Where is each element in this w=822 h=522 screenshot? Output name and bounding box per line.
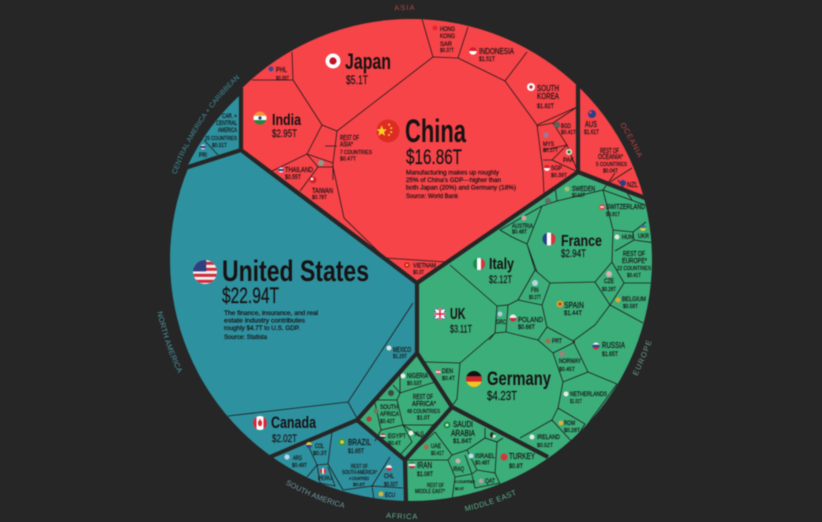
label: India xyxy=(272,112,301,140)
label: Israel: $0.48T xyxy=(475,460,491,466)
label: Russia: RUSSIA xyxy=(602,340,625,350)
label: Chile: $0.32T xyxy=(384,482,399,488)
label: India: India xyxy=(272,112,301,129)
region name: Asia: ASIA xyxy=(394,4,415,11)
flag: United States xyxy=(193,260,217,284)
label: Rest of Middle East: MIDDLE EAST* xyxy=(415,489,446,495)
label: South Africa: $0.42T xyxy=(380,419,396,425)
label: Rest of Oceania: $0.04T xyxy=(603,168,618,174)
label: Poland: POLAND xyxy=(518,315,543,324)
label: United States: United States xyxy=(222,255,369,288)
label: Czechia xyxy=(602,271,617,293)
label: Czechia: CZE xyxy=(604,279,614,285)
label: Hong Kong: KONG xyxy=(440,33,455,40)
label: Hong Kong: $0.37T xyxy=(440,48,455,54)
label: Indonesia xyxy=(469,47,515,63)
flag: Germany xyxy=(466,371,482,387)
note: China manufacturing: Manufacturing makes up roughly xyxy=(406,170,499,176)
region name: North America: NORTH AMERICA xyxy=(157,311,182,374)
region name: Central America + Caribbean: CENTRAL AMERICA + CARIBBEAN xyxy=(172,74,240,174)
label: Rest of Oceania: REST OF xyxy=(600,148,619,155)
label: Saudi Arabia: SAUDI xyxy=(453,420,473,429)
label: United States xyxy=(222,255,369,308)
label: Ecuador: ECU xyxy=(385,493,395,499)
label: Belgium xyxy=(616,297,646,310)
label: Italy xyxy=(489,256,514,286)
label: Rest of Asia xyxy=(340,135,373,162)
label: Switzerland: SWITZERLAND xyxy=(606,204,645,211)
region: Middle East labels xyxy=(408,420,536,495)
label: Canada xyxy=(271,413,316,445)
label: Hong Kong: SAR xyxy=(440,41,452,48)
label: Hungary: HUN xyxy=(622,235,633,241)
label: Nigeria: $0.53T xyxy=(407,381,423,387)
label: South Africa: AFRICA xyxy=(380,411,400,418)
panel: Asia and Oceania xyxy=(242,18,644,281)
label: Belgium: $0.59T xyxy=(623,304,639,310)
label: Singapore xyxy=(544,165,568,179)
label: Malaysia: $0.37T xyxy=(543,148,559,154)
region: Central America labels: PRI xyxy=(199,153,207,159)
label: Romania: $0.28T xyxy=(564,428,581,434)
label: Rest of Oceania: OCEANIA* xyxy=(598,154,623,161)
label: Qatar: QAT xyxy=(485,479,495,485)
label: Rest of Middle East: $0.3T xyxy=(455,486,464,491)
label: UAE xyxy=(424,443,444,457)
label: Finland: FIN xyxy=(531,288,538,294)
label: Chile: CHL xyxy=(384,474,395,480)
flag: India xyxy=(254,112,266,124)
label: Colombia: COL xyxy=(315,443,324,450)
label: Austria: $0.48T xyxy=(512,230,527,236)
label: Rest of Asia: 7 COUNTRIES xyxy=(340,150,373,156)
label: Rest of Europe: 22 COUNTRIES xyxy=(617,266,651,272)
label: UAE: UAE xyxy=(431,443,441,450)
label: Poland: $0.66T xyxy=(518,325,535,331)
panel: North America xyxy=(169,152,416,456)
label: Rest of Europe: REST OF xyxy=(623,251,645,258)
label: Rest of South America: 4 COUNTRIES xyxy=(349,476,369,481)
label: Sweden: $0.63T xyxy=(572,193,585,199)
label: Rest of Africa: $1.0T xyxy=(417,416,431,422)
icon: Kuwait-like small flag xyxy=(490,432,496,438)
label: Rest of Europe: $0.41T xyxy=(627,273,642,279)
label: Turkey: $0.8T xyxy=(509,463,523,470)
label: Denmark: $0.4T xyxy=(442,376,456,382)
region: Central America labels: 25 COUNTRIES xyxy=(205,136,238,142)
region name: South America: SOUTH AMERICA xyxy=(286,480,344,508)
label: Denmark: DEN xyxy=(442,369,453,375)
icon: Myanmar-like gray flag xyxy=(318,160,324,166)
label: France: $2.94T xyxy=(561,248,586,260)
chart: GDP voronoi circle xyxy=(169,18,653,502)
region: Central America labels: CAR. + xyxy=(222,114,237,120)
label: Saudi Arabia: $1.84T xyxy=(453,438,472,445)
region name: Middle East: MIDDLE EAST xyxy=(464,489,516,512)
region names around the circle xyxy=(157,4,652,520)
label: Vietnam: VIETNAM xyxy=(413,262,436,270)
label: UK: UK xyxy=(450,306,466,323)
label: Rest of Oceania: 5 COUNTRIES xyxy=(596,162,628,168)
region: Asia labels xyxy=(254,26,577,276)
label: Mexico: $1.29T xyxy=(393,354,408,360)
label: Ireland: IRELAND xyxy=(537,434,560,441)
label: Egypt xyxy=(380,433,406,447)
label: Malaysia: MYS xyxy=(543,141,555,148)
label: Germany: $4.23T xyxy=(487,388,517,403)
label: Iran: IRAN xyxy=(417,461,432,470)
label: Brazil xyxy=(338,437,371,455)
label: Switzerland xyxy=(599,204,645,218)
region: Central America labels: $0.51T xyxy=(212,143,228,149)
region: North America labels xyxy=(193,255,411,445)
label: Peru: PERU xyxy=(318,476,332,482)
label: Iran: $1.08T xyxy=(417,471,433,478)
flag: Italy xyxy=(473,258,485,270)
label: Canada: $2.02T xyxy=(272,433,297,445)
label: Finland xyxy=(529,280,541,301)
label: Philippines: PHL xyxy=(276,67,287,74)
note: China manufacturing: 25% of China's GDP—higher than xyxy=(406,178,501,184)
label: Rest of Middle East: REST OF xyxy=(427,483,444,489)
label: Switzerland: $0.81T xyxy=(606,212,621,218)
note: China manufacturing xyxy=(406,170,516,200)
label: Hungary xyxy=(614,234,633,241)
label: Rest of South America: SOUTH AMERICA* xyxy=(342,470,378,476)
thick region borders xyxy=(185,85,645,503)
label: UK: $3.11T xyxy=(450,324,472,336)
label: Rest of Oceania xyxy=(596,148,628,174)
label: Indonesia: INDONESIA xyxy=(479,47,515,56)
label: Rest of Europe: EUROPE* xyxy=(622,258,647,265)
label: South Korea: $1.82T xyxy=(537,103,554,110)
label: South Korea: KOREA xyxy=(537,92,560,101)
label: Saudi Arabia: ARABIA xyxy=(451,429,476,438)
region: Central America labels xyxy=(199,114,238,159)
label: Thailand xyxy=(278,167,313,181)
label: Austria xyxy=(512,216,533,236)
label: Taiwan: $0.78T xyxy=(312,195,328,201)
label: Spain xyxy=(556,300,584,317)
label: Rest of Middle East xyxy=(415,479,475,495)
note: US finance: roughly $4.7T to U.S. GDP. xyxy=(224,326,300,332)
note: US finance xyxy=(224,311,318,341)
label: Japan xyxy=(345,49,391,87)
label: Australia xyxy=(584,110,599,136)
region: Central America labels: AMERICA xyxy=(218,128,237,134)
label: Philippines xyxy=(268,66,289,82)
label: Bangladesh: BGD xyxy=(561,123,571,130)
label: Vietnam: $0.3T xyxy=(413,270,424,276)
label: New Zealand: NZL xyxy=(627,182,638,189)
label: Sweden xyxy=(564,186,595,199)
icon: Kenya-like small flag xyxy=(388,390,394,396)
label: South Africa xyxy=(374,404,400,425)
label: India: $2.95T xyxy=(272,128,297,140)
label: Nigeria: NIGERIA xyxy=(407,373,428,380)
label: Rest of Asia: REST OF xyxy=(340,135,359,142)
label: Romania: ROM xyxy=(564,421,575,427)
label: Rest of Africa: REST OF xyxy=(413,394,433,401)
label: Egypt: $0.4T xyxy=(388,441,402,447)
label: Rest of Asia: ASIA* xyxy=(340,142,353,148)
label: United States: $22.94T xyxy=(222,283,279,308)
label: Bangladesh: $0.41T xyxy=(561,130,577,136)
label: Ireland: $0.52T xyxy=(537,443,554,449)
label: Finland: $0.27T xyxy=(529,295,541,301)
note: China manufacturing: both Japan (20%) and Germany (18%) xyxy=(406,186,516,192)
label: Vietnam xyxy=(404,262,436,276)
label: Taiwan xyxy=(310,177,333,201)
label: Japan: $5.1T xyxy=(346,73,368,87)
label: Rest of Middle East: 4 COUNTRIES xyxy=(455,479,475,484)
label: Denmark xyxy=(435,369,456,382)
region: Oceania labels xyxy=(584,110,638,189)
label: Thailand: THAILAND xyxy=(285,167,313,174)
region name: Africa: AFRICA xyxy=(386,512,418,520)
label: Netherlands: NETHERLANDS xyxy=(570,391,608,398)
label: Greece xyxy=(496,312,506,326)
label: Italy: $2.12T xyxy=(489,274,512,286)
label: Portugal xyxy=(546,338,562,345)
panel: South America xyxy=(273,422,404,502)
label: Iran xyxy=(408,461,433,478)
label: France xyxy=(561,233,602,260)
label: Poland xyxy=(510,314,543,331)
label: Russia xyxy=(592,340,625,358)
label: Germany xyxy=(487,368,551,403)
label: Rest of Africa: 48 COUNTRIES xyxy=(407,409,440,415)
label: Czechia: $0.28T xyxy=(602,287,617,293)
flag: UK xyxy=(434,308,446,320)
region name: Europe: EUROPE xyxy=(632,340,652,376)
panel: Central America and Caribbean xyxy=(187,96,239,167)
label: Egypt: EGYPT xyxy=(388,433,406,440)
label: Rest of Europe xyxy=(617,251,651,279)
icon: Luxembourg-like small flag xyxy=(545,198,551,204)
label: Argentina: ARG xyxy=(293,456,302,462)
label: Brazil: $1.65T xyxy=(348,449,364,455)
label: South Korea xyxy=(527,83,560,110)
flag: Japan xyxy=(326,54,340,68)
region name: Oceania: OCEANIA xyxy=(620,122,642,158)
label: Rest of Africa: AFRICA* xyxy=(412,401,436,408)
label: UAE: $0.41T xyxy=(431,451,444,457)
label: Pakistan: PAK xyxy=(563,157,575,164)
flag: France xyxy=(542,232,556,246)
label: Hong Kong xyxy=(432,26,455,54)
label: Hong Kong: HONG xyxy=(440,26,455,33)
label: Iraq: IRAQ xyxy=(453,467,464,473)
label: Mexico xyxy=(386,346,411,360)
label: Norway xyxy=(559,352,581,373)
label: Argentina: $0.49T xyxy=(292,463,308,469)
note: China manufacturing: Source: World Bank xyxy=(406,194,459,200)
icon: Morocco-like red flag xyxy=(366,416,372,422)
label: China: $16.86T xyxy=(406,146,462,169)
label: Israel: ISRAEL xyxy=(475,454,496,460)
label: China: China xyxy=(405,113,466,149)
label: South Korea: SOUTH xyxy=(537,84,559,93)
label: Netherlands xyxy=(564,391,608,405)
label: Spain: SPAIN xyxy=(564,301,584,310)
label: Portugal: PRT xyxy=(552,339,562,345)
label: Indonesia: $1.51T xyxy=(479,56,495,63)
label: Bangladesh xyxy=(554,122,577,136)
label: Rest of South America: REST OF xyxy=(351,464,368,470)
label: Rest of South America xyxy=(342,464,378,487)
note: US finance: estate industry contributes xyxy=(224,318,305,324)
label: Italy: Italy xyxy=(489,256,514,273)
label: Singapore: $0.39T xyxy=(551,173,568,179)
label: Rest of Africa xyxy=(407,394,440,422)
label: UK xyxy=(450,306,472,336)
label: Netherlands: $1.01T xyxy=(570,399,582,405)
label: Greece: GRC xyxy=(496,320,506,326)
label: Rest of South America: $0.6T xyxy=(353,482,365,487)
label: Israel xyxy=(468,454,496,466)
label: Australia: $1.61T xyxy=(584,129,599,136)
label: Philippines: $0.39T xyxy=(276,76,289,82)
label: Russia: $1.65T xyxy=(602,351,618,358)
label: Colombia: $0.3T xyxy=(313,451,328,457)
label: Algeria: ALG xyxy=(415,432,424,438)
label: Colombia xyxy=(306,442,328,457)
label: Chile xyxy=(384,465,399,488)
label: Saudi Arabia xyxy=(444,420,476,445)
panel: Africa xyxy=(357,353,452,460)
label: Pakistan xyxy=(563,149,575,164)
label: Sweden: SWEDEN xyxy=(572,186,595,193)
note: US finance: Source: Statista xyxy=(224,335,268,341)
label: Spain: $1.44T xyxy=(564,310,582,317)
label: Norway: NORWAY xyxy=(559,359,581,365)
panel: Europe xyxy=(418,174,653,458)
label: Thailand: $0.55T xyxy=(285,175,301,181)
label: Belgium: BELGIUM xyxy=(622,297,646,303)
region: Central America labels: CENTRAL xyxy=(216,121,237,127)
label: China xyxy=(405,113,466,169)
label: Nigeria xyxy=(400,373,428,387)
label: South Africa: SOUTH xyxy=(380,404,398,411)
note: US finance: The finance, insurance, and real xyxy=(224,311,318,317)
label: Malaysia xyxy=(543,132,559,154)
label: Japan: Japan xyxy=(345,49,391,74)
panel: Middle East xyxy=(406,409,549,502)
flag: China xyxy=(376,120,400,142)
label: Rest of Asia: $0.47T xyxy=(340,156,357,162)
flag: Canada xyxy=(253,416,267,430)
label: Ukraine xyxy=(638,225,650,240)
label: Canada: Canada xyxy=(271,413,316,432)
label: Australia: AUS xyxy=(585,120,597,129)
label: Taiwan: TAIWAN xyxy=(312,188,333,195)
label: Brazil: BRAZIL xyxy=(348,437,371,447)
label: Romania xyxy=(558,420,581,434)
label: Norway: $0.45T xyxy=(559,367,576,373)
label: Ireland xyxy=(530,434,560,449)
label: Mexico: MEXICO xyxy=(393,347,411,354)
label: Argentina xyxy=(284,454,308,469)
label: Turkey xyxy=(500,452,536,470)
label: Austria: AUSTRIA xyxy=(512,223,533,230)
label: Germany: Germany xyxy=(487,368,551,390)
region: Europe labels xyxy=(434,186,651,449)
label: Singapore: SGP xyxy=(551,165,562,172)
region: Africa labels xyxy=(366,373,440,447)
region: South America labels xyxy=(284,437,399,499)
label: France: France xyxy=(561,233,602,250)
label: Turkey: TURKEY xyxy=(509,452,536,461)
label: Ukraine: UKR xyxy=(638,234,650,240)
